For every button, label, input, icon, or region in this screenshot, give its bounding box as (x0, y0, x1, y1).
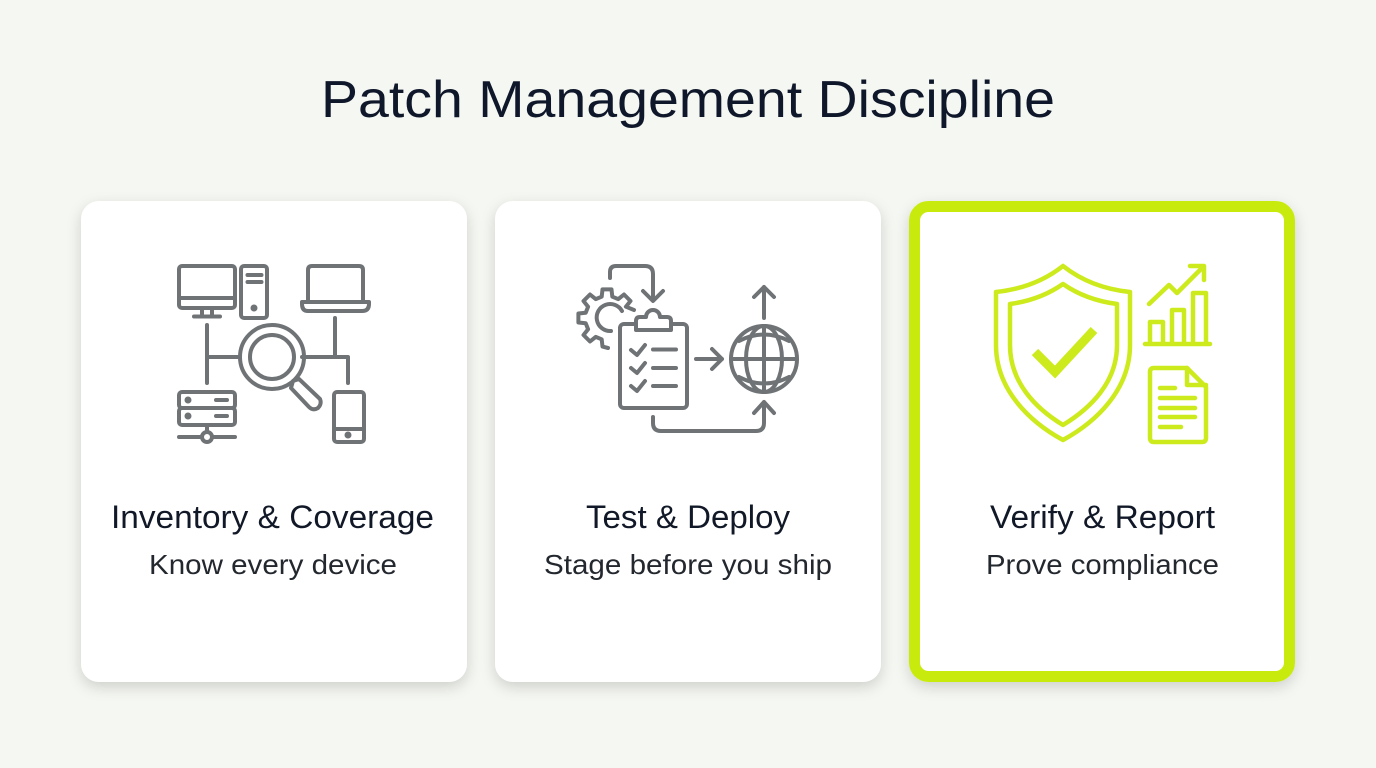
card background (81, 201, 467, 682)
panel: inventory and coverage (81, 201, 467, 682)
panel: test and deploy (495, 201, 881, 682)
title: Patch Management Discipline (321, 71, 1055, 129)
icon: test and deploy workflow (578, 266, 797, 431)
card subtitle: Know every device (149, 549, 397, 580)
panel: verify and report (914, 206, 1290, 676)
card heading: Inventory & Coverage (111, 499, 434, 535)
card heading: Test & Deploy (586, 499, 790, 535)
card background with lime border (914, 206, 1290, 676)
icon: device inventory network (179, 266, 369, 442)
card heading: Verify & Report (990, 499, 1215, 535)
icon: compliance shield, chart and document (996, 266, 1210, 442)
card background (495, 201, 881, 682)
card subtitle: Prove compliance (986, 549, 1219, 580)
card subtitle: Stage before you ship (544, 549, 832, 580)
